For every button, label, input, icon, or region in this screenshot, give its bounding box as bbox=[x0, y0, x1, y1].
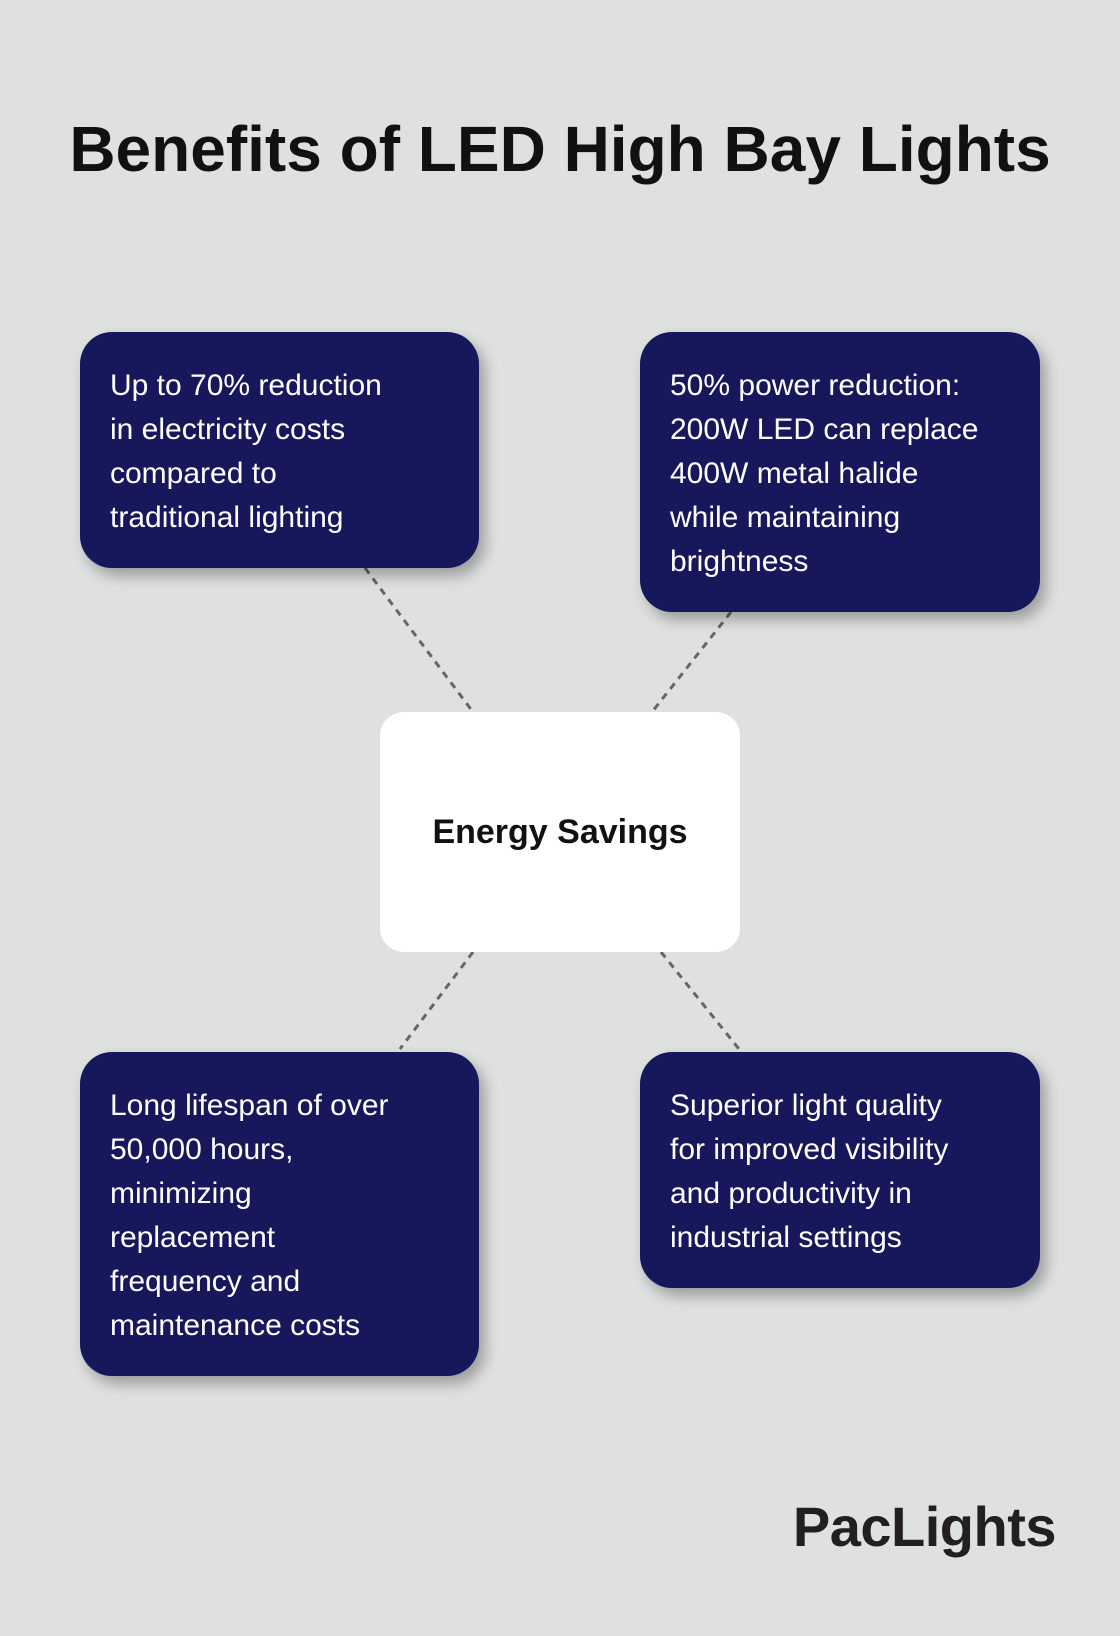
panel: electricity costs: traditional lighting bbox=[110, 501, 343, 534]
center node: Energy Savings bbox=[432, 812, 688, 850]
panel: power reduction: 50% power reduction: bbox=[670, 369, 960, 402]
panel: lifespan: 50,000 hours, bbox=[110, 1133, 293, 1166]
panel: light quality bbox=[640, 1052, 1040, 1288]
panel: electricity costs: Up to 70% reduction bbox=[110, 369, 382, 402]
center node bbox=[380, 712, 740, 952]
panel: power reduction: brightness bbox=[670, 545, 808, 578]
panel: power reduction bbox=[640, 332, 1040, 612]
panel: power reduction: while maintaining bbox=[670, 501, 900, 534]
panel: power reduction: 400W metal halide bbox=[670, 457, 918, 490]
panel: light quality: for improved visibility bbox=[670, 1133, 948, 1166]
panel: lifespan: maintenance costs bbox=[110, 1309, 360, 1342]
panel: electricity costs bbox=[80, 332, 479, 568]
panel: lifespan: Long lifespan of over bbox=[110, 1089, 389, 1122]
panel: lifespan: replacement bbox=[110, 1221, 275, 1254]
title: Benefits of LED High Bay Lights bbox=[69, 113, 1051, 185]
panel: electricity costs: in electricity costs bbox=[110, 413, 345, 446]
logo: PacLights bbox=[793, 1495, 1056, 1558]
panel: electricity costs: compared to bbox=[110, 457, 277, 490]
panel: lifespan: minimizing bbox=[110, 1177, 252, 1210]
panel: lifespan: frequency and bbox=[110, 1265, 300, 1298]
panel: light quality: and productivity in bbox=[670, 1177, 912, 1210]
panel: power reduction: 200W LED can replace bbox=[670, 413, 978, 446]
panel: light quality: Superior light quality bbox=[670, 1089, 942, 1122]
panel: light quality: industrial settings bbox=[670, 1221, 902, 1254]
panel: lifespan bbox=[80, 1052, 479, 1376]
